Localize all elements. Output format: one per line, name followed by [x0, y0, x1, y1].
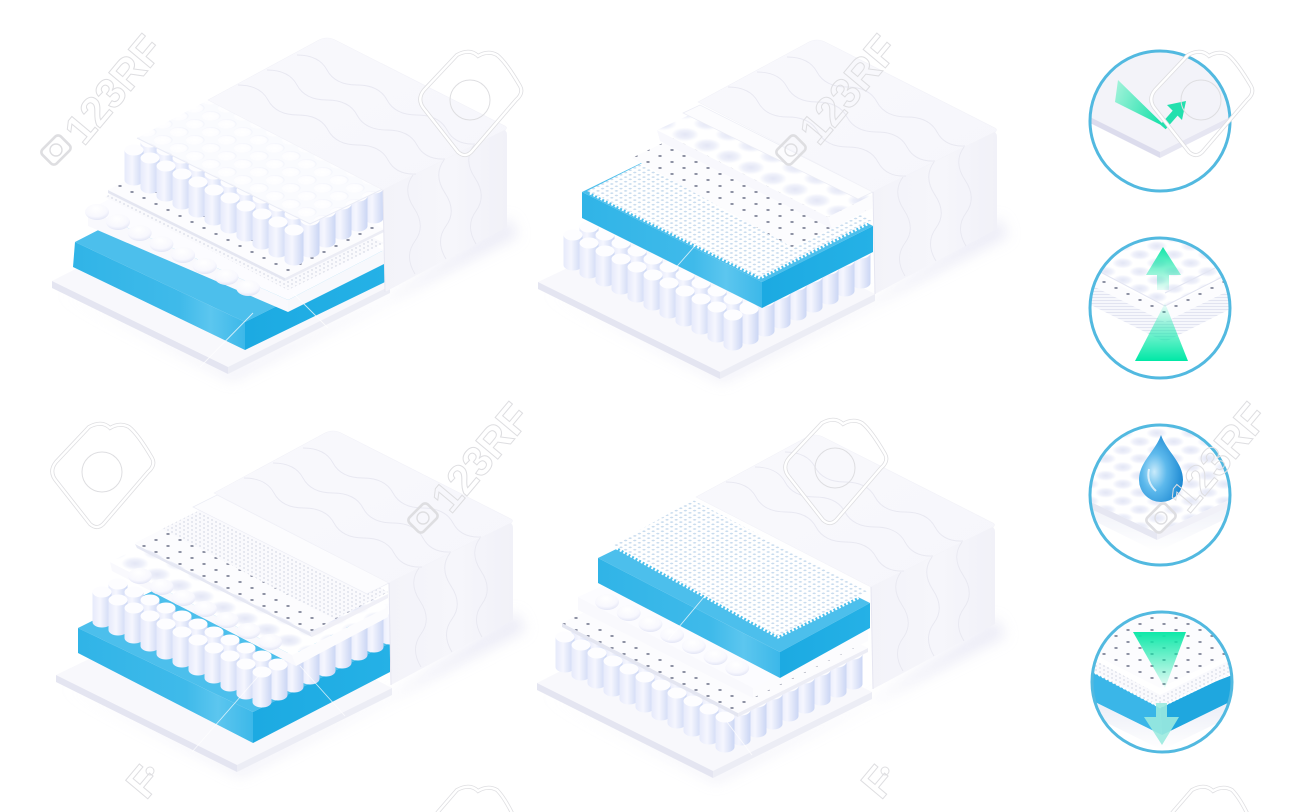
ground shadow	[58, 218, 518, 380]
mattress 4: bottom right	[537, 435, 1006, 782]
pocket springs	[564, 222, 870, 350]
blue foam layer	[582, 134, 873, 308]
watermark bottom centre: F	[852, 757, 904, 807]
watermark middle: 123RF	[422, 394, 539, 521]
pocket springs	[92, 578, 400, 708]
watermark top left: 123RF	[55, 26, 172, 153]
upward air wedge	[1135, 303, 1188, 361]
water drop	[1139, 435, 1183, 502]
glint lines	[192, 666, 345, 752]
pocket springs	[556, 624, 862, 752]
perforated latex sheet	[108, 140, 384, 281]
sheet surface	[1092, 52, 1228, 158]
egg-crate surface	[1092, 427, 1228, 540]
ground shadow	[543, 618, 1006, 782]
watermark bottom left: F	[117, 757, 169, 807]
base layer	[52, 198, 390, 374]
egg-crate foam layer	[578, 545, 868, 698]
perforated latex sheet	[562, 560, 868, 717]
blob watermark 5	[437, 787, 512, 812]
thin top sheet	[683, 105, 873, 199]
blob watermark 2	[1151, 52, 1252, 155]
ring	[1090, 238, 1230, 378]
base layer	[537, 603, 872, 778]
feature icon 2: airflow through layers	[1088, 236, 1232, 380]
watermark top centre: 123RF	[790, 26, 907, 153]
blob watermark 1	[420, 52, 521, 155]
ring	[1090, 51, 1230, 191]
mesh layer	[613, 500, 868, 637]
reflected arrow	[1163, 101, 1186, 127]
egg-crate foam layer	[85, 160, 384, 312]
downward arrow	[1144, 703, 1179, 745]
layer stack	[1092, 240, 1228, 340]
mesh layer	[587, 134, 873, 278]
egg-crate foam layer	[657, 110, 872, 229]
mattress 1: top left	[52, 38, 518, 380]
ring	[1092, 612, 1232, 752]
glint line	[672, 231, 708, 272]
watermark middle right: 123RF	[1160, 394, 1277, 521]
upward arrow head	[1146, 247, 1181, 290]
thin top sheet	[193, 495, 389, 594]
base layer	[538, 205, 875, 379]
downward wedge	[1133, 632, 1186, 688]
layers	[1094, 617, 1230, 735]
glint line	[668, 597, 752, 755]
quilted pad over springs	[137, 100, 385, 224]
perforated latex sheet	[135, 503, 388, 637]
outer cover sleeve	[208, 38, 507, 292]
feature icon 3: moisture resistance	[1088, 424, 1232, 566]
perforated latex sheet	[632, 125, 873, 247]
mesh layer	[105, 150, 384, 290]
outer cover sleeve	[214, 431, 513, 685]
incoming wedge	[1115, 80, 1167, 128]
blob watermark 3	[52, 424, 153, 527]
ground shadow	[62, 612, 526, 776]
blue foam layer	[78, 560, 390, 743]
mattress 3: bottom left	[56, 431, 526, 776]
ring	[1090, 425, 1230, 565]
blob watermark 4	[785, 420, 886, 523]
feature icon 4: pressure absorption	[1090, 610, 1234, 754]
blue foam layer	[73, 170, 385, 350]
fine mesh layer	[162, 503, 388, 619]
feature icon 1: surface reflection	[1088, 50, 1232, 192]
base layer	[56, 598, 392, 772]
pocket springs	[124, 136, 432, 266]
ground shadow	[544, 218, 1008, 382]
blue foam layer	[598, 513, 870, 678]
outer cover sleeve	[698, 40, 997, 294]
blob watermark 6	[1172, 787, 1247, 812]
glint lines	[200, 293, 328, 367]
mattress 2: top right	[538, 40, 1008, 382]
outer cover sleeve	[696, 435, 995, 689]
egg-crate foam layer	[110, 514, 388, 666]
